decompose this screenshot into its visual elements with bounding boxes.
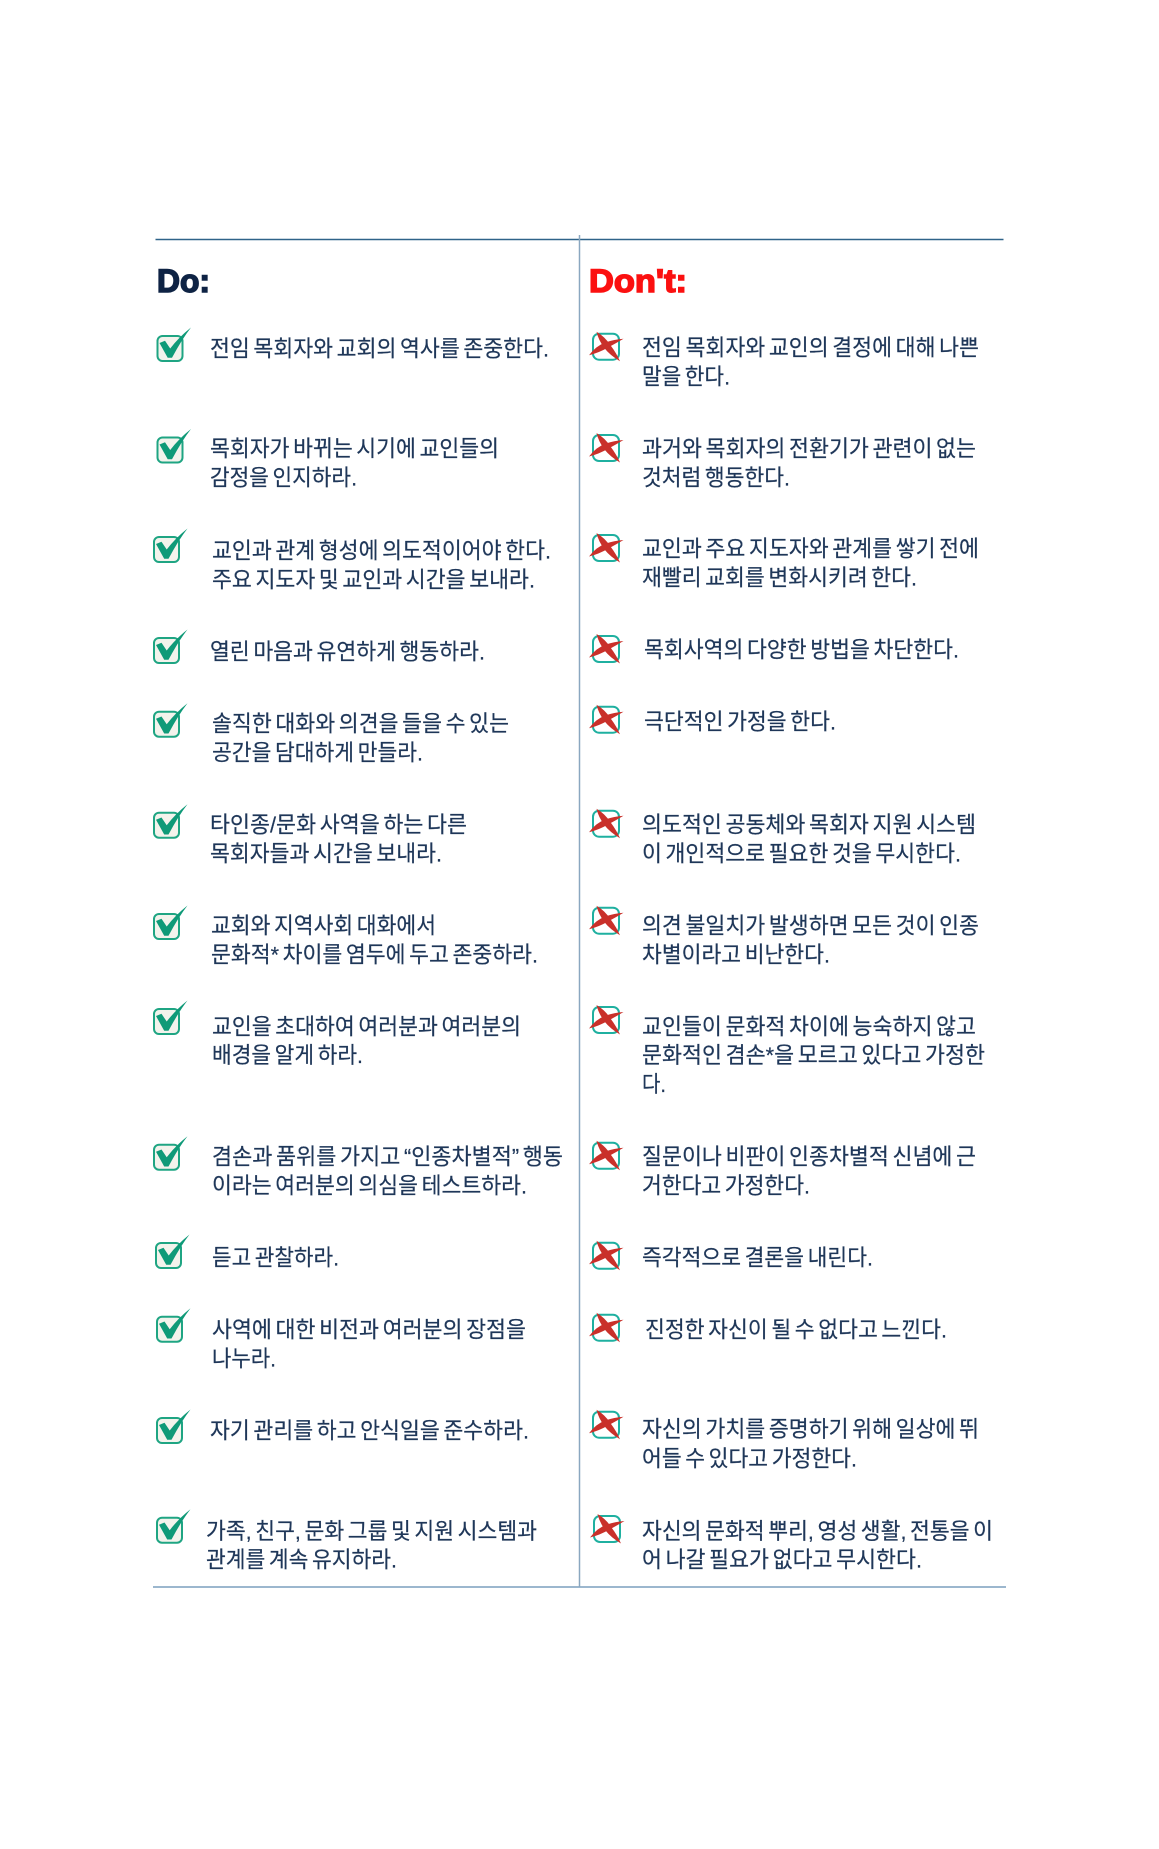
don't item 5: 극단적인 가정을 한다. [644,709,836,734]
don't item 13 [590,1514,993,1572]
don't item 2: 것처럼 행동한다. [642,465,790,490]
don't item 3 [589,533,979,590]
do item 5: 공간을 담대하게 만들라. [212,740,423,765]
don't item 2: 과거와 목회자의 전환기가 관련이 없는 [642,436,976,461]
do item 11: 사역에 대한 비전과 여러분의 장점을 [212,1317,526,1342]
do item 10 [156,1234,339,1270]
do item 4: 열린 마음과 유연하게 행동하라. [210,639,485,664]
do item 12: 자기 관리를 하고 안식일을 준수하라. [210,1418,529,1443]
don't item 10 [589,1241,873,1270]
do item 13: 가족, 친구, 문화 그룹 및 지원 시스템과 [206,1519,537,1544]
do item 4 [154,630,485,664]
don't item 3: 교인과 주요 지도자와 관계를 쌓기 전에 [642,536,979,561]
don't item 1 [589,332,979,389]
do item 1: 전임 목회자와 교회의 역사를 존중한다. [210,336,549,361]
do item 2 [158,429,499,490]
don't item 6 [589,809,976,866]
don't item 12: 자신의 가치를 증명하기 위해 일상에 뛰 [642,1417,979,1442]
don't item 11 [589,1313,947,1342]
don't item 7: 차별이라고 비난한다. [642,942,830,967]
do item 6 [154,804,467,866]
panel: do column [154,263,563,1572]
do item 5: 솔직한 대화와 의견을 들을 수 있는 [212,711,509,736]
do item 6: 목회자들과 시간을 보내라. [210,841,442,866]
do item 2: 목회자가 바뀌는 시기에 교인들의 [210,436,499,461]
do item 9: 겸손과 품위를 가지고 “인종차별적” 행동 [212,1144,563,1169]
don't item 6: 의도적인 공동체와 목회자 지원 시스템 [642,812,976,837]
do item 3: 주요 지도자 및 교인과 시간을 보내라. [212,567,535,592]
do item 10: 듣고 관찰하라. [212,1245,339,1270]
don't item 6: 이 개인적으로 필요한 것을 무시한다. [642,841,961,866]
don't item 9: 거한다고 가정한다. [642,1173,810,1198]
don't item 8: 문화적인 겸손*을 모르고 있다고 가정한 [642,1043,985,1068]
don't item 8 [589,1005,985,1097]
do item 8: 교인을 초대하여 여러분과 여러분의 [212,1014,521,1039]
don't item 4: 목회사역의 다양한 방법을 차단한다. [644,637,959,662]
do item 9: 이라는 여러분의 의심을 테스트하라. [212,1173,527,1198]
don't item 13: 자신의 문화적 뿌리, 영성 생활, 전통을 이 [642,1519,993,1544]
do item 13 [157,1509,537,1572]
don't item 11: 진정한 자신이 될 수 없다고 느낀다. [645,1317,947,1342]
don't item 10: 즉각적으로 결론을 내린다. [642,1245,873,1270]
heading: Don't: Don't: [589,263,687,299]
do item 1 [158,328,549,361]
do item 11 [157,1308,526,1371]
do item 7: 교회와 지역사회 대화에서 [211,913,436,938]
panel: don't column [589,263,993,1572]
don't item 8: 다. [642,1072,666,1097]
don't item 12: 어들 수 있다고 가정한다. [642,1446,857,1471]
don't item 9: 질문이나 비판이 인종차별적 신념에 근 [642,1144,976,1169]
don't item 12 [589,1410,979,1471]
don't item 8: 교인들이 문화적 차이에 능숙하지 않고 [642,1014,976,1039]
don't item 5 [589,705,836,734]
do item 7: 문화적* 차이를 염두에 두고 존중하라. [211,942,538,967]
don't item 2 [589,433,976,490]
do item 8: 배경을 알게 하라. [212,1043,363,1068]
do item 2: 감정을 인지하라. [210,465,357,490]
do item 11: 나누라. [212,1346,276,1371]
do item 6: 타인종/문화 사역을 하는 다른 [210,812,467,837]
do item 9 [154,1136,563,1198]
do item 3 [154,528,551,592]
don't item 9 [589,1141,976,1198]
don't item 1: 말을 한다. [642,364,730,389]
don't item 13: 어 나갈 필요가 없다고 무시한다. [642,1547,922,1572]
heading: Do: Do: [157,263,210,299]
don't item 1: 전임 목회자와 교인의 결정에 대해 나쁜 [642,335,979,360]
don't item 3: 재빨리 교회를 변화시키려 한다. [642,565,917,590]
do item 8 [154,1000,521,1068]
do item 12 [157,1410,529,1443]
don't item 7 [589,906,979,967]
do item 3: 교인과 관계 형성에 의도적이어야 한다. [212,538,551,563]
do item 7 [154,906,538,967]
don't item 7: 의견 불일치가 발생하면 모든 것이 인종 [642,913,979,938]
do item 13: 관계를 계속 유지하라. [206,1547,397,1572]
do item 5 [154,703,509,765]
